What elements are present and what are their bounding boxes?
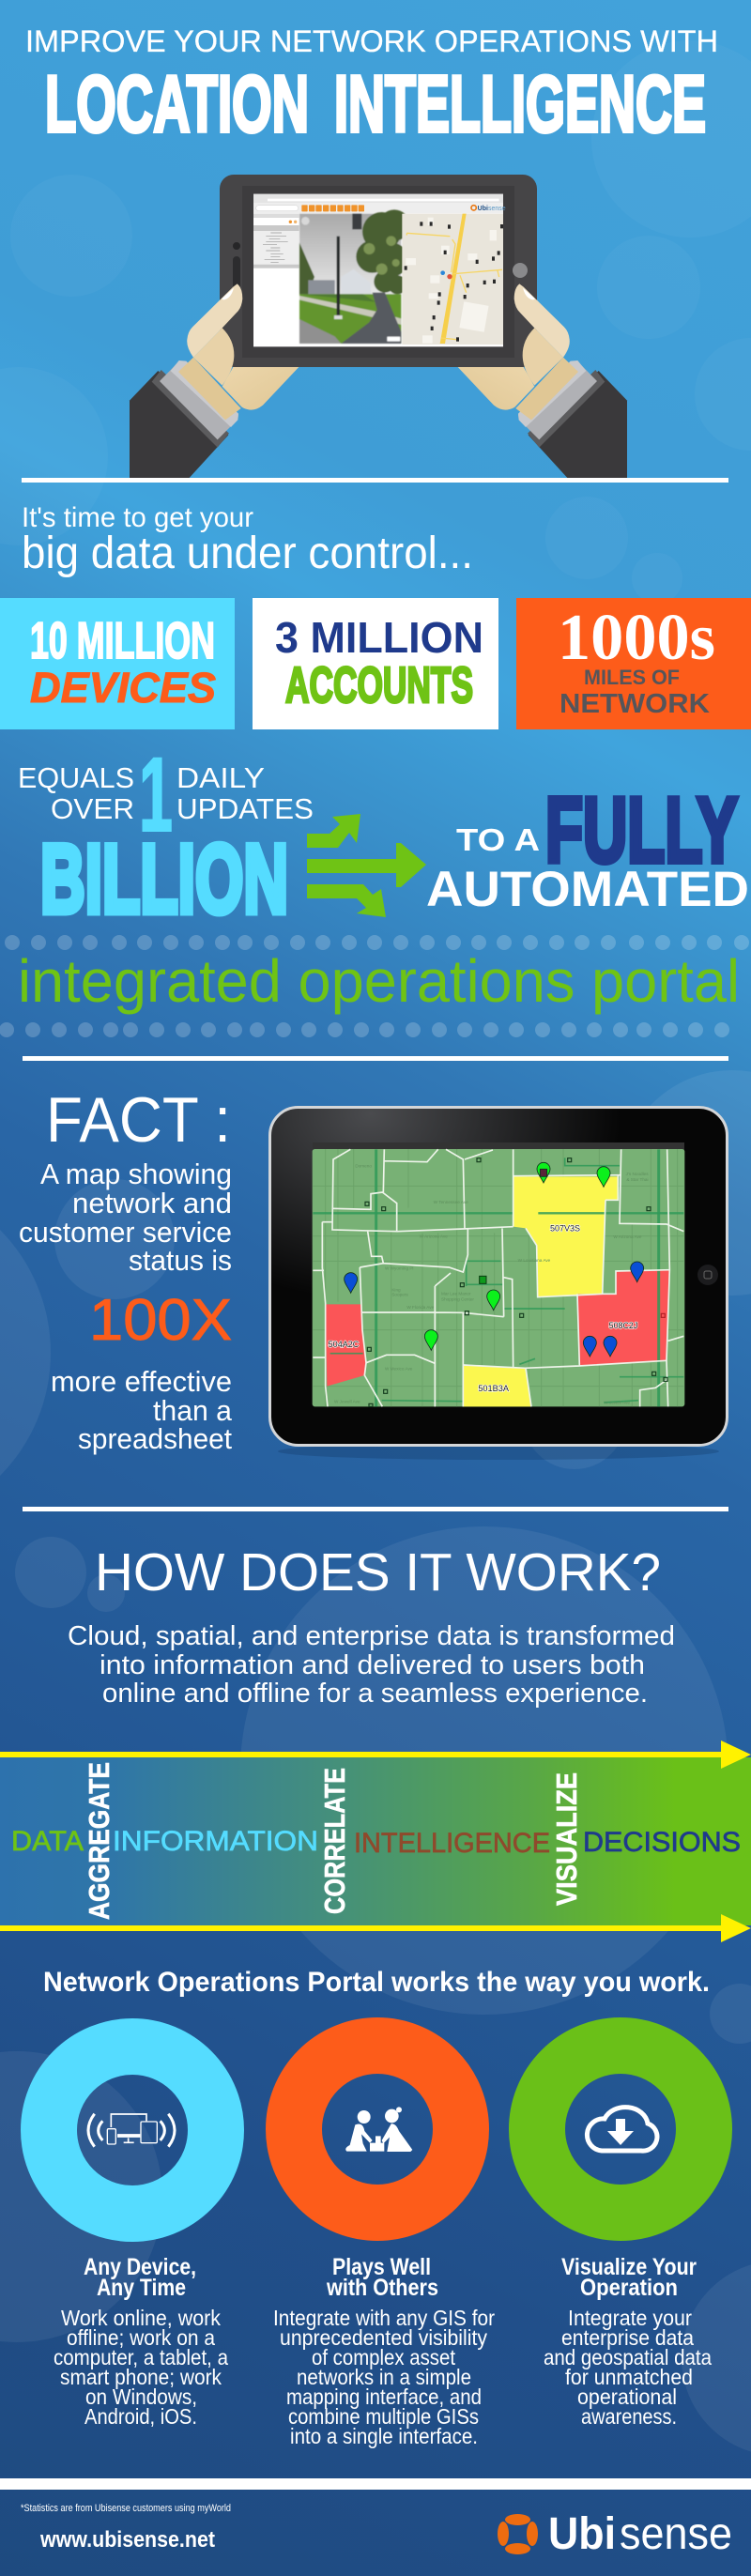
status map: W Wyoming Pl — [385, 1266, 413, 1271]
status map: Shopping Center — [441, 1296, 474, 1301]
heading: Any Device, — [84, 2254, 196, 2280]
heading: Visualize Your — [561, 2254, 697, 2280]
status map: W Mexico Ave — [385, 1366, 413, 1371]
ring: green — [537, 2046, 704, 2213]
body text: computer, a tablet, a — [54, 2345, 228, 2369]
body text: unprecedented visibility — [280, 2325, 487, 2350]
stat box: 10 million devices — [0, 598, 235, 729]
status map: W Arizona Ave — [613, 1234, 642, 1239]
dotted row top — [5, 935, 749, 950]
to a fully automated: AUTOMATED — [426, 862, 749, 917]
tablet body — [220, 175, 537, 367]
fact text: spreadsheet — [78, 1422, 232, 1455]
stat box: 10 million devices: 10 MILLION — [30, 611, 215, 669]
body text — [273, 2306, 495, 2448]
equals over 1 billion daily updates: EQUALS — [18, 761, 134, 794]
tablet screen: portal screenshot: sense — [488, 206, 506, 212]
service area: 508C2J — [577, 1270, 669, 1366]
description paragraph: Cloud, spatial, and enterprise data is transformed — [68, 1621, 675, 1651]
body text: mapping interface, and — [286, 2384, 482, 2409]
status map: W Florida Ave — [406, 1305, 435, 1310]
body text: and geospatial data — [544, 2345, 712, 2369]
top yellow arrow — [0, 1740, 751, 1769]
stat box: 3 million accounts — [253, 598, 498, 729]
service area: 507V3S — [513, 1176, 618, 1297]
illustration: hands holding tablet — [130, 175, 627, 478]
map pins — [345, 1162, 644, 1357]
status map: W Tennessee Ave — [434, 1200, 468, 1204]
status map: Domeno — [355, 1163, 372, 1168]
tablet screen: portal screenshot: Ubi — [478, 206, 488, 212]
stat box: 3 million accounts: ACCOUNTS — [285, 657, 473, 713]
right arm and hand — [458, 284, 627, 478]
column: plays well with others — [273, 2046, 495, 2448]
equals over 1 billion daily updates: UPDATES — [176, 792, 314, 825]
title: LOCATION — [45, 60, 309, 149]
equals over 1 billion daily updates: DAILY — [176, 761, 265, 794]
service area: 504A2C — [326, 1304, 366, 1387]
heading: Any Time — [97, 2275, 186, 2301]
heading: with Others — [326, 2275, 438, 2301]
body text: Android, iOS. — [84, 2404, 197, 2429]
status map: W Louisiana Ave — [518, 1258, 551, 1263]
ipad with status map — [270, 1108, 727, 1460]
status map: 508C2J — [609, 1321, 637, 1330]
body text — [544, 2306, 712, 2429]
title: IMPROVE YOUR NETWORK OPERATIONS WITH — [25, 24, 718, 58]
equals over 1 billion daily updates — [18, 736, 314, 934]
to a fully automated — [426, 778, 749, 917]
footnote: *Statistics are from Ubisense customers using myWorld — [21, 2503, 231, 2514]
integrated operations portal: integrated operations portal — [18, 947, 740, 1015]
street view — [299, 209, 410, 344]
body text: Integrate your — [568, 2306, 692, 2330]
ubisense logo: Ubi — [548, 2509, 616, 2559]
ubisense logo: sense — [620, 2509, 732, 2559]
stat box: 3 million accounts: 3 MILLION — [275, 613, 483, 662]
body text — [54, 2306, 228, 2429]
status map: W Jewell Ave — [604, 1400, 630, 1404]
process band — [0, 1740, 751, 1942]
heading — [561, 2254, 697, 2301]
process band: DATA — [11, 1826, 84, 1857]
body text: networks in a simple — [297, 2365, 471, 2389]
body text: into a single interface. — [290, 2424, 478, 2448]
heading: Operation — [580, 2275, 678, 2301]
intro text — [22, 502, 473, 578]
heading — [84, 2254, 196, 2301]
intro text: big data under control... — [22, 529, 473, 578]
status map: & Star Thai — [626, 1177, 649, 1182]
fact text: network and — [72, 1187, 232, 1219]
description paragraph — [68, 1621, 675, 1709]
body text: combine multiple GISs — [288, 2404, 479, 2429]
status map: Soopers — [391, 1293, 408, 1297]
description paragraph: into information and delivered to users both — [100, 1650, 645, 1680]
body text: of complex asset — [312, 2345, 456, 2369]
fact text: customer service — [19, 1216, 232, 1249]
body text: Integrate with any GIS for — [273, 2306, 495, 2330]
status map: W Jewell Ave — [334, 1400, 360, 1404]
icon: connected devices — [88, 2114, 175, 2147]
three green arrows — [307, 814, 426, 917]
body text: enterprise data — [561, 2325, 694, 2350]
body text: awareness. — [581, 2404, 677, 2429]
title — [25, 24, 718, 149]
stat box: 1000s miles of network: MILES OF — [584, 666, 680, 689]
equals over 1 billion daily updates: OVER — [51, 792, 134, 825]
process band: VISUALIZE — [550, 1772, 583, 1906]
process band: AGGREGATE — [83, 1762, 115, 1920]
body text: for unmatched — [565, 2365, 693, 2389]
body text: offline; work on a — [67, 2325, 215, 2350]
fact text: A map showing — [40, 1158, 232, 1190]
tablet screen: portal screenshot — [253, 194, 506, 346]
ubisense logo — [498, 2509, 732, 2559]
fact text — [19, 1084, 233, 1455]
stat box: 1000s miles of network — [516, 598, 751, 729]
fact text: FACT : — [46, 1084, 231, 1156]
status map: W Arizona Ave — [420, 1234, 448, 1238]
status map: 501B3A — [478, 1384, 509, 1393]
description paragraph: online and offline for a seamless experience. — [102, 1679, 648, 1709]
ring: orange — [294, 2046, 461, 2213]
website: www.ubisense.net — [39, 2527, 215, 2553]
body text: operational — [577, 2384, 677, 2409]
process band: INTELLIGENCE — [354, 1828, 550, 1859]
how does it work heading: HOW DOES IT WORK? — [95, 1542, 661, 1602]
status map: King — [391, 1287, 401, 1292]
column: any device — [49, 2047, 228, 2429]
to a fully automated: TO A — [456, 822, 540, 857]
fact text: 100X — [89, 1288, 232, 1353]
stat box: 1000s miles of network: 1000s — [558, 602, 715, 674]
status map — [313, 1149, 684, 1406]
body text: smart phone; work — [60, 2365, 222, 2389]
section heading: Network Operations Portal works the way you work. — [43, 1967, 710, 1998]
body text: Work online, work — [61, 2306, 221, 2330]
status map: 504A2C — [329, 1340, 360, 1349]
fact text: status is — [129, 1244, 232, 1277]
equals over 1 billion daily updates: BILLION — [40, 825, 288, 934]
left panel — [253, 214, 299, 344]
icon: two children with blocks — [345, 2107, 412, 2152]
process band: CORRELATE — [318, 1768, 351, 1914]
fact text: than a — [153, 1394, 233, 1427]
stat box: 1000s miles of network: NETWORK — [559, 689, 710, 719]
icon: cloud download — [587, 2108, 657, 2151]
background circles lower — [0, 1070, 751, 2456]
status map: J's Noodles — [626, 1172, 649, 1176]
left arm and hand — [130, 284, 299, 478]
bottom yellow arrow — [0, 1914, 751, 1942]
map view — [402, 214, 503, 345]
process band: DECISIONS — [583, 1827, 741, 1858]
column: visualize your operation — [537, 2046, 712, 2429]
equals over 1 billion daily updates: 1 — [139, 736, 173, 853]
service area: 501B3A — [463, 1365, 531, 1406]
heading — [326, 2254, 438, 2301]
process band: INFORMATION — [113, 1826, 318, 1857]
ring: cyan — [49, 2047, 216, 2214]
status map: Mar Lee Manor — [441, 1291, 471, 1296]
heading: Plays Well — [332, 2254, 431, 2280]
body text: on Windows, — [85, 2384, 197, 2409]
fact text: more effective — [51, 1365, 232, 1398]
stat box: 10 million devices: DEVICES — [30, 664, 216, 712]
status map: 507V3S — [550, 1224, 580, 1234]
dotted row bottom — [0, 1022, 729, 1037]
background circles upper — [0, 40, 751, 604]
intro text: It's time to get your — [22, 502, 253, 533]
